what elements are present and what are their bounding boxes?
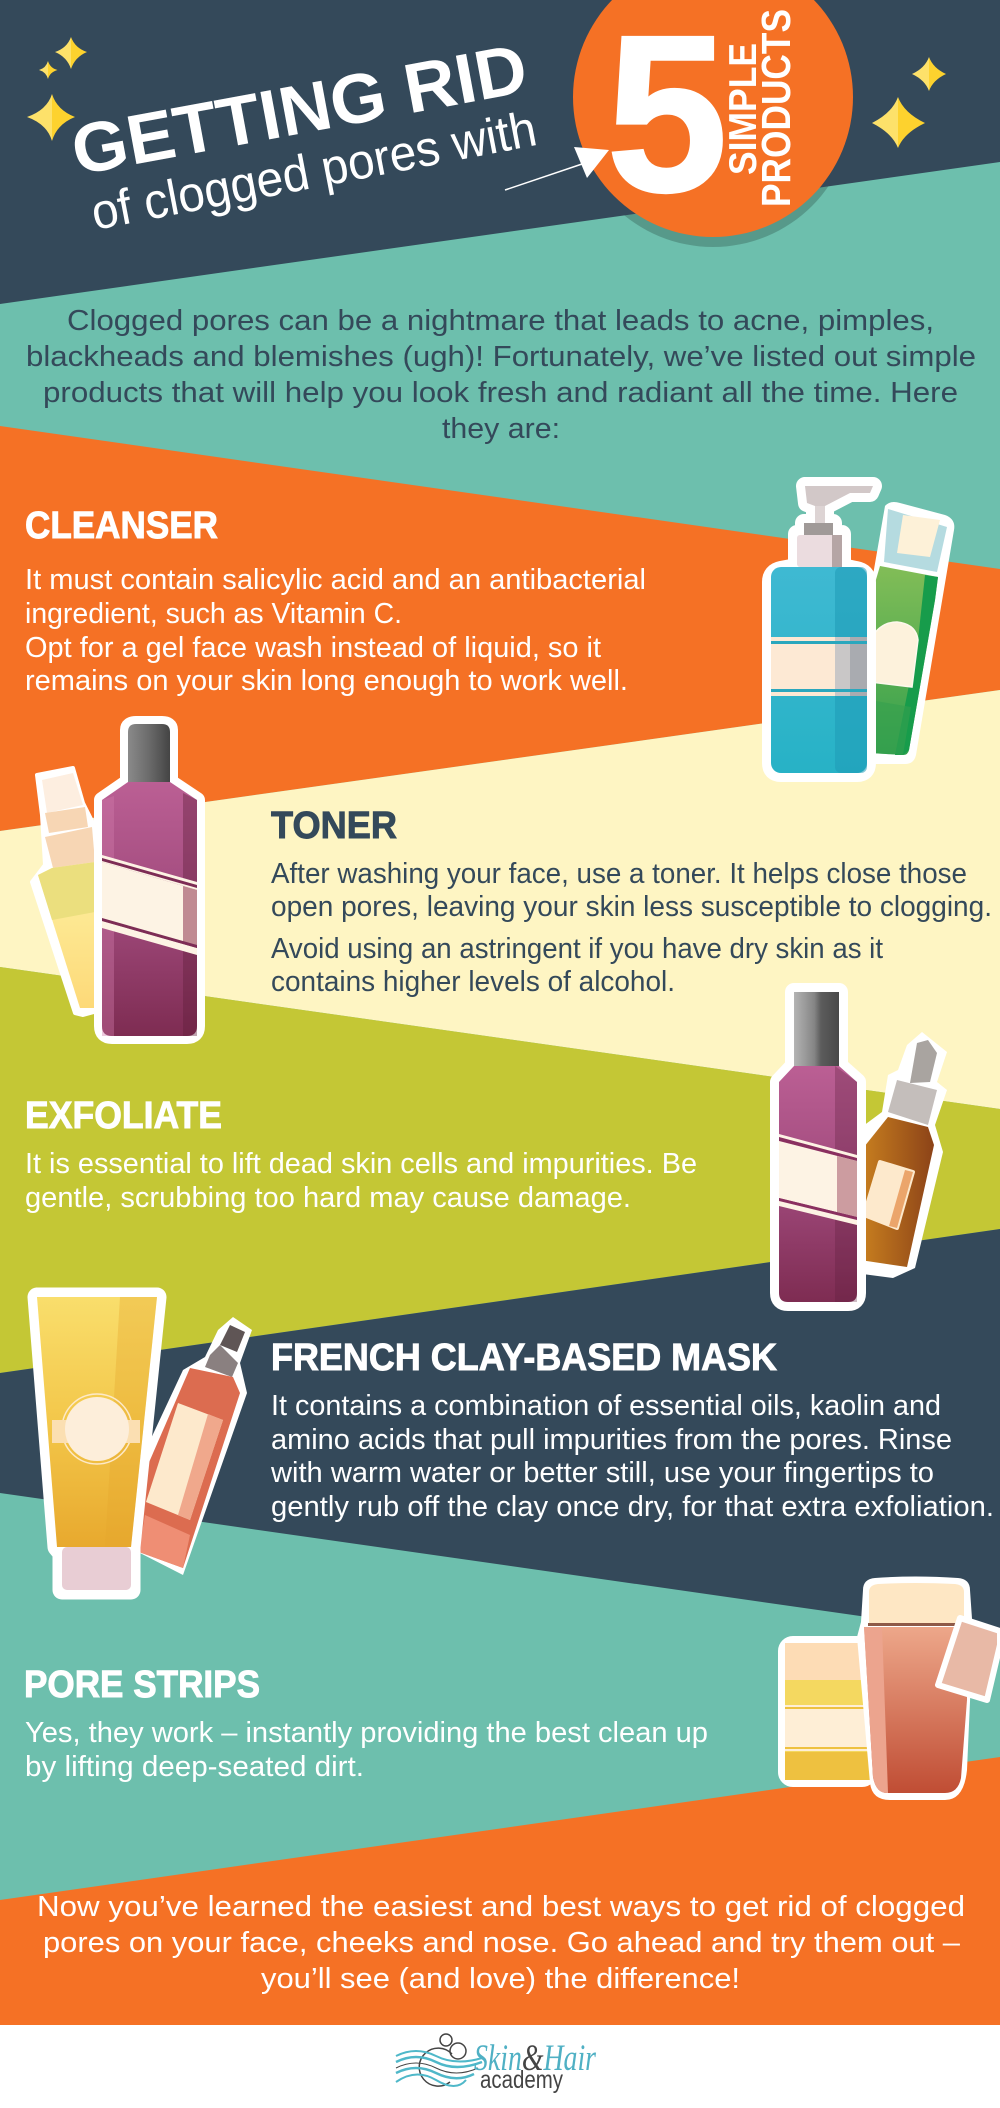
intro text: blackheads and blemishes (ugh)! Fortunately, we’ve listed out simple [26,341,976,373]
coral jar [857,1576,973,1800]
purple bottle [102,724,197,1036]
text: toner body: After washing your face, use a toner. It helps close those [271,858,967,890]
footer: white strip [0,2025,1000,2108]
heading: exfoliate: EXFOLIATE [25,1095,222,1137]
icon: sparkles right [872,57,946,148]
yellow spray [32,768,95,1015]
text: exfoliate body: It is essential to lift dead skin cells and impurities. Be [25,1148,697,1180]
heading: french clay-based mask: FRENCH CLAY-BASED MASK [271,1337,778,1379]
text: mask body: gently rub off the clay once dry, for that extra exfoliation. [271,1491,994,1523]
text: toner body: contains higher levels of alcohol. [271,966,675,998]
icon: cleanser pump and green tube [771,486,954,773]
text: toner body: Avoid using an astringent if you have dry skin as it [271,933,883,965]
logo academy: academy [480,2066,563,2094]
closing text [37,1891,965,1995]
dropper [855,1032,947,1278]
circle shadow [573,0,853,247]
badge text: simple: SIMPLE [722,43,765,175]
text: pore strips body [25,1717,708,1783]
intro text [26,305,976,445]
text: pore strips body: Yes, they work – instantly providing the best clean up [25,1717,708,1749]
closing text: Now you’ve learned the easiest and best ways to get rid of clogged [37,1891,965,1923]
text: mask body [270,1390,994,1523]
text: cleanser body [25,564,646,697]
heading: pore strips: PORE STRIPS [24,1664,260,1706]
band: cream toner [0,690,1000,1109]
heading: toner: TONER [271,805,397,847]
icon: toner bottle and yellow spray [32,724,197,1036]
icon: mask tubes [37,1297,252,1590]
purple bottle [779,992,857,1302]
closing text: you’ll see (and love) the difference! [261,1963,740,1995]
arrow to badge [505,147,609,190]
text: exfoliate body: gentle, scrubbing too hard may cause damage. [25,1182,631,1214]
text: toner body: open pores, leaving your skin less susceptible to clogging. [271,891,992,923]
text: toner body [271,858,992,998]
logo: skin & hair academy [396,2034,596,2094]
band: navy header [0,0,1000,304]
red tube [139,1317,252,1575]
text: cleanser body: remains on your skin long enough to work well. [25,665,628,697]
text: cleanser body: ingredient, such as Vitamin C. [25,598,402,630]
pump bottle [771,486,873,773]
icon: exfoliate bottle and dropper [779,992,947,1302]
yellow jar [785,1643,870,1780]
text: exfoliate body [25,1148,697,1214]
logo wordmark: Skin&Hair [474,2038,596,2079]
text: cleanser body: Opt for a gel face wash instead of liquid, so it [25,632,601,664]
green tube [860,502,954,764]
intro text: they are: [442,413,560,445]
band: orange closing [0,1757,1000,2025]
band: orange cleanser [0,426,1000,831]
yellow tube [37,1297,157,1590]
intro text: products that will help you look fresh and radiant all the time. Here [43,377,958,409]
subtitle: of clogged pores with: of clogged pores with [86,100,541,241]
icon: pore strip jars [785,1576,1000,1800]
band: navy mask [0,1229,1000,1636]
title: getting rid: GETTING RID [66,29,533,190]
text: mask body: with warm water or better still, use your fingertips to [270,1457,934,1489]
band: olive exfoliate [0,967,1000,1373]
strip [938,1618,1000,1700]
orange circle badge [573,0,853,237]
text: mask body: amino acids that pull impurities from the pores. Rinse [271,1424,952,1456]
text: mask body: It contains a combination of essential oils, kaolin and [271,1390,941,1422]
text: pore strips body: by lifting deep-seated dirt. [25,1751,364,1783]
intro text: Clogged pores can be a nightmare that leads to acne, pimples, [67,305,934,337]
closing text: pores on your face, cheeks and nose. Go ahead and try them out – [43,1927,961,1959]
icon: sparkles left [27,37,87,141]
heading: cleanser: CLEANSER [25,505,218,547]
text: cleanser body: It must contain salicylic acid and an antibacterial [25,564,646,596]
logo mark [396,2034,482,2086]
